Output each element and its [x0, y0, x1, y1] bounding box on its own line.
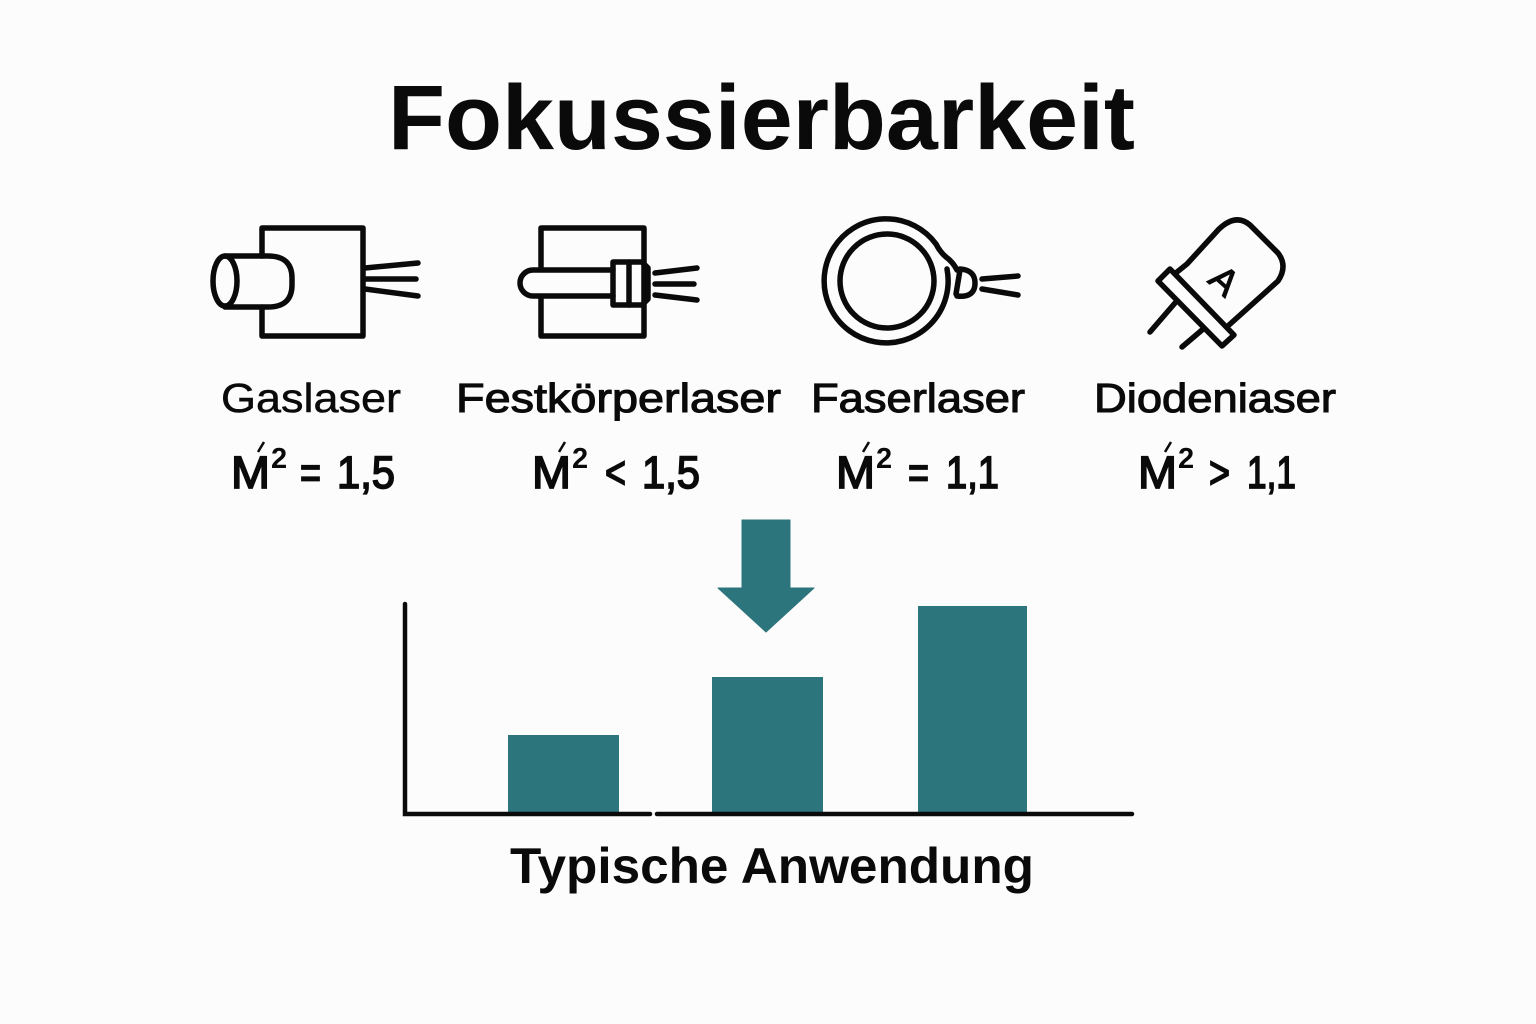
- chart caption: Typische Anwendung: [510, 838, 1034, 894]
- icon: gas laser: [213, 228, 418, 336]
- icon: diode laser: [1150, 220, 1283, 347]
- icon: diode laser: A: [1201, 257, 1247, 304]
- value: diode laser: M: [1138, 447, 1177, 498]
- value: solid state laser: 1,5: [642, 447, 700, 498]
- value: gas laser: [231, 442, 395, 498]
- label: Gaslaser: Gaslaser: [221, 375, 401, 421]
- bar: high: [918, 606, 1027, 814]
- value: fiber laser: =: [908, 447, 929, 498]
- chart axes: [405, 604, 1132, 814]
- value: diode laser: 2: [1178, 443, 1194, 475]
- icon: solid state laser: [520, 228, 697, 336]
- value: solid state laser: [532, 442, 700, 498]
- value: fiber laser: M: [836, 447, 875, 498]
- value: solid state laser: M: [532, 447, 571, 498]
- value: gas laser: M: [231, 447, 270, 498]
- value: diode laser: [1138, 442, 1296, 498]
- value: solid state laser: <: [605, 447, 626, 498]
- value: gas laser: 2: [271, 443, 287, 475]
- bar: low: [508, 735, 619, 814]
- value: solid state laser: 2: [572, 443, 588, 475]
- bar: medium: [712, 677, 823, 814]
- value: fiber laser: [836, 442, 999, 498]
- arrow: [718, 520, 814, 632]
- label: Diodenlaser: Diodeniaser: [1094, 375, 1336, 421]
- value: fiber laser: 2: [876, 443, 892, 475]
- value: diode laser: 1,1: [1247, 447, 1296, 498]
- value: gas laser: =: [300, 447, 321, 498]
- value: gas laser: 1,5: [337, 447, 395, 498]
- label: Faserlaser: Faserlaser: [811, 375, 1025, 421]
- icon: fiber laser: [824, 219, 1018, 343]
- value: fiber laser: 1,1: [946, 447, 999, 498]
- value: diode laser: >: [1209, 447, 1230, 498]
- label: Festkörperlaser: Festkörperlaser: [456, 375, 781, 421]
- title: Fokussierbarkeit: [388, 67, 1135, 169]
- bar chart: [405, 604, 1132, 814]
